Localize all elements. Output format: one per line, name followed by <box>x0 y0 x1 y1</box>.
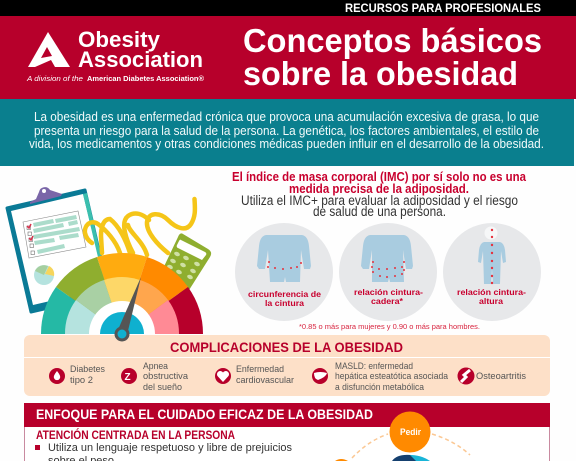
complication: cardiovascular disease: cardiovascular <box>236 375 294 386</box>
measure: waist-hip ratio <box>339 223 437 321</box>
measure: waist circumference <box>235 223 333 321</box>
measure: waist circumference: circunferencia de <box>248 289 321 299</box>
measure: waist-height ratio: altura <box>479 296 503 306</box>
complication: MASLD liver <box>312 361 449 393</box>
care heading: ENFOQUE PARA EL CUIDADO EFICAZ DE LA OBESIDAD <box>36 406 373 422</box>
title <box>243 22 542 92</box>
top bar: professional resources: RECURSOS PARA PROFESIONALES <box>345 1 541 15</box>
gauge chart <box>41 253 203 334</box>
measure: waist-height ratio: relación cintura- <box>457 287 526 297</box>
title: Conceptos básicos <box>243 22 542 59</box>
BMI heading: de salud de una persona. <box>313 204 446 219</box>
intro panel: La obesidad es una enfermedad crónica que provoca una acumulación excesiva de grasa, lo que <box>34 110 539 124</box>
step: Pedir: Pedir <box>400 427 421 437</box>
complication: osteoarthritis <box>458 368 526 384</box>
intro panel: vida, los medicamentos y otras condiciones médicas pueden influir en el desarrollo de la obesidad. <box>29 137 544 151</box>
complication: type 2 diabetes: tipo 2 <box>70 375 93 386</box>
complication: MASLD liver: MASLD: enfermedad <box>335 361 413 372</box>
complication: cardiovascular disease: Enfermedad <box>236 364 284 375</box>
care cycle diagram <box>335 412 470 461</box>
complication: sleep apnea: del sueño <box>143 382 182 393</box>
icon: clipboard <box>7 187 109 312</box>
complication: sleep apnea <box>121 361 189 393</box>
header banner <box>0 16 576 99</box>
BMI heading: Utiliza el IMC+ para evaluar la adiposidad y el riesgo <box>241 193 518 208</box>
gauge needle <box>116 277 141 340</box>
complications heading: COMPLICACIONES DE LA OBESIDAD <box>170 339 403 355</box>
icon: measuring tape <box>85 199 195 255</box>
person-centered care text: Utiliza un lenguaje respetuoso y libre de prejuicios <box>48 442 292 454</box>
complication: MASLD liver: a disfunción metabólica <box>335 382 425 393</box>
intro panel <box>0 99 574 166</box>
BMI heading <box>232 169 527 219</box>
complication: MASLD liver: hepática esteatótica asociada <box>335 371 449 382</box>
complication: cardiovascular disease <box>215 364 294 386</box>
icon: calculator <box>160 233 211 298</box>
top bar: professional resources <box>0 0 576 16</box>
logo: Obesity Association: Association <box>78 47 203 72</box>
panel: effective care approach <box>24 403 550 461</box>
measure: waist-height ratio <box>443 223 541 321</box>
complication: type 2 diabetes <box>49 364 105 386</box>
complication: sleep apnea: Apnea <box>143 361 169 372</box>
complication: type 2 diabetes: Diabetes <box>70 364 105 375</box>
measure: waist-hip ratio: relación cintura- <box>354 287 423 297</box>
logo: Obesity Association: A division of the <box>26 74 83 83</box>
complication: sleep apnea: obstructiva <box>143 371 189 382</box>
logo: Obesity Association: American Diabetes Association® <box>87 74 204 83</box>
person-centered care text: ATENCIÓN CENTRADA EN LA PERSONA <box>36 429 235 442</box>
care heading <box>24 403 550 427</box>
complication: sleep apnea: Z <box>124 372 131 383</box>
measure: waist circumference: la cintura <box>265 298 304 308</box>
intro panel: presenta un riesgo para la salud de la persona. La genética, los factores ambientales, el estilo de <box>34 124 539 138</box>
logo: Obesity Association <box>26 27 204 83</box>
BMI heading: El índice de masa corporal (IMC) por sí solo no es una <box>232 169 527 184</box>
footnote: *0.85 o más para mujeres y 0.90 o más para hombres. <box>299 322 480 331</box>
person-centered care text <box>35 429 292 461</box>
measure: waist-hip ratio: cadera* <box>371 296 404 306</box>
complication: osteoarthritis: Osteoartritis <box>476 371 526 382</box>
logo: Obesity Association: Obesity <box>78 27 161 52</box>
BMI heading: medida precisa de la adiposidad. <box>289 181 469 196</box>
panel: complications <box>24 335 550 396</box>
title: sobre la obesidad <box>243 55 518 92</box>
